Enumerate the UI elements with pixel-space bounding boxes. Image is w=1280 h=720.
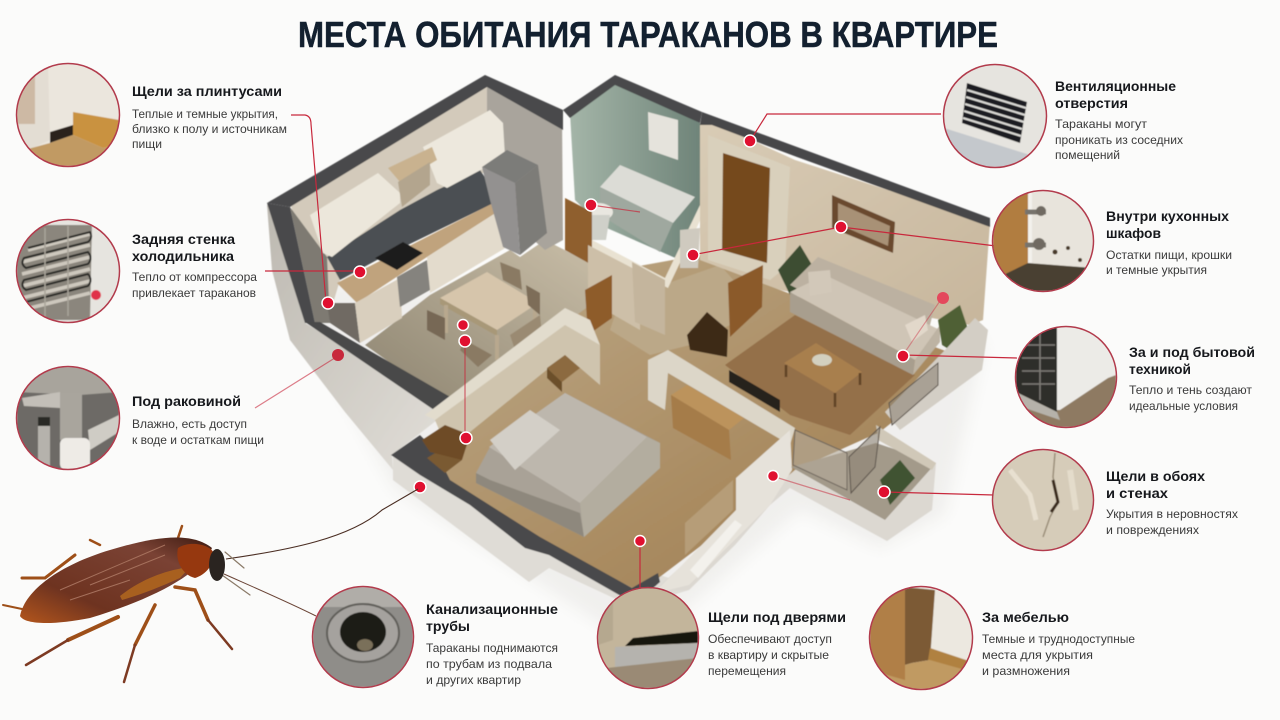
door and living room wall: [700, 112, 990, 337]
description: и других квартир: [426, 673, 521, 687]
description: [708, 632, 832, 678]
icon: condenser coil: [17, 220, 119, 322]
bedroom outer wall top: [391, 435, 660, 604]
heading: Под раковиной: [132, 393, 241, 409]
heading: Щели под дверями: [708, 609, 846, 625]
callout: ventilation openings: [944, 64, 1183, 168]
kitchen walls: [267, 75, 563, 412]
description: и темные укрытия: [1106, 263, 1207, 277]
apartment floor plan: [267, 75, 990, 650]
location markers: [322, 135, 949, 546]
description: Остатки пищи, крошки: [1106, 248, 1232, 262]
description: перемещения: [708, 664, 786, 678]
callout: behind appliances: [1016, 326, 1255, 428]
description: по трубам из подвала: [426, 657, 552, 671]
kitchen units: [310, 110, 547, 367]
heading: трубы: [426, 618, 470, 634]
description: проникать из соседних: [1055, 133, 1183, 147]
description: [132, 107, 287, 151]
heading: [1129, 344, 1255, 377]
heading: Задняя стенка: [132, 231, 235, 247]
heading: Щели за плинтусами: [132, 83, 282, 99]
callout: sewer pipes: [312, 586, 558, 688]
description: пищи: [132, 137, 162, 151]
description: Влажно, есть доступ: [132, 417, 247, 431]
description: и размножения: [982, 664, 1070, 678]
description: Укрытия в неровностях: [1106, 507, 1238, 521]
description: к воде и остаткам пищи: [132, 433, 264, 447]
description: [1055, 117, 1183, 162]
cockroach: [3, 489, 418, 682]
bedroom furniture: [422, 355, 744, 473]
description: привлекает тараканов: [132, 286, 256, 300]
description: Теплые и темные укрытия,: [132, 107, 278, 121]
description: Тепло от компрессора: [132, 270, 257, 284]
icon: wardrobe corner: [870, 587, 972, 689]
description: [132, 417, 264, 447]
title: МЕСТА ОБИТАНИЯ ТАРАКАНОВ В КВАРТИРЕ: [298, 14, 998, 55]
icon: open cabinet: [993, 191, 1093, 291]
head: [209, 549, 225, 581]
heading: За и под бытовой: [1129, 344, 1255, 360]
description: идеальные условия: [1129, 399, 1238, 413]
living room furniture: [687, 257, 988, 430]
callout: cracks in wallpaper and walls: [992, 450, 1238, 550]
description: Тараканы поднимаются: [426, 641, 558, 655]
icon: wall crack: [993, 450, 1093, 550]
description: [1129, 383, 1253, 413]
description: [982, 632, 1135, 678]
description: близко к полу и источникам: [132, 122, 287, 136]
description: места для укрытия: [982, 648, 1093, 662]
description: Темные и труднодоступные: [982, 632, 1135, 646]
description: [1106, 507, 1238, 537]
interior bedroom walls: [425, 308, 795, 592]
callout: gaps under doors: [598, 588, 846, 688]
heading: Канализационные: [426, 601, 558, 617]
balcony with railings: [791, 363, 938, 520]
description: Обеспечивают доступ: [708, 632, 832, 646]
icon: door gap: [598, 588, 698, 688]
callout: behind furniture: [870, 586, 1135, 690]
description: [1106, 248, 1232, 277]
heading: и стенах: [1106, 485, 1168, 501]
heading: Внутри кухонных: [1106, 208, 1229, 224]
heading: [1106, 208, 1229, 241]
icon: vent grille: [944, 65, 1046, 167]
heading: [132, 231, 235, 264]
abdomen and wings: [20, 537, 212, 623]
heading: [426, 601, 558, 634]
heading: техникой: [1129, 361, 1191, 377]
heading: шкафов: [1106, 225, 1161, 241]
description: Тараканы могут: [1055, 117, 1148, 131]
outer wall faces: [267, 205, 936, 607]
bathroom: [563, 75, 706, 335]
ground shadow: [280, 280, 985, 650]
description: [426, 641, 558, 687]
heading: холодильника: [132, 248, 234, 264]
description: помещений: [1055, 148, 1120, 162]
heading: Вентиляционные: [1055, 78, 1176, 94]
heading: [1055, 78, 1176, 111]
heading: За мебелью: [982, 609, 1069, 625]
connector lines: [255, 114, 1017, 590]
callout: baseboards: [16, 64, 287, 166]
icon: sink siphon: [17, 367, 119, 470]
icon: drain: [313, 587, 413, 687]
description: и повреждениях: [1106, 523, 1199, 537]
pronotum: [177, 544, 213, 578]
floors: [365, 240, 970, 592]
heading: отверстия: [1055, 95, 1128, 111]
icon: baseboard gap: [17, 64, 119, 166]
icon: appliance back: [1016, 327, 1116, 427]
bed: [476, 393, 660, 537]
callout: inside kitchen cabinets: [992, 190, 1232, 292]
legs: [3, 526, 250, 682]
callout: under the sink: [16, 366, 264, 470]
callout: refrigerator back: [16, 220, 257, 322]
antennae: [226, 489, 418, 559]
description: в квартиру и скрытые: [708, 648, 829, 662]
heading: [1106, 468, 1205, 501]
description: Тепло и тень создают: [1129, 383, 1253, 397]
heading: Щели в обоях: [1106, 468, 1205, 484]
description: [132, 270, 257, 300]
